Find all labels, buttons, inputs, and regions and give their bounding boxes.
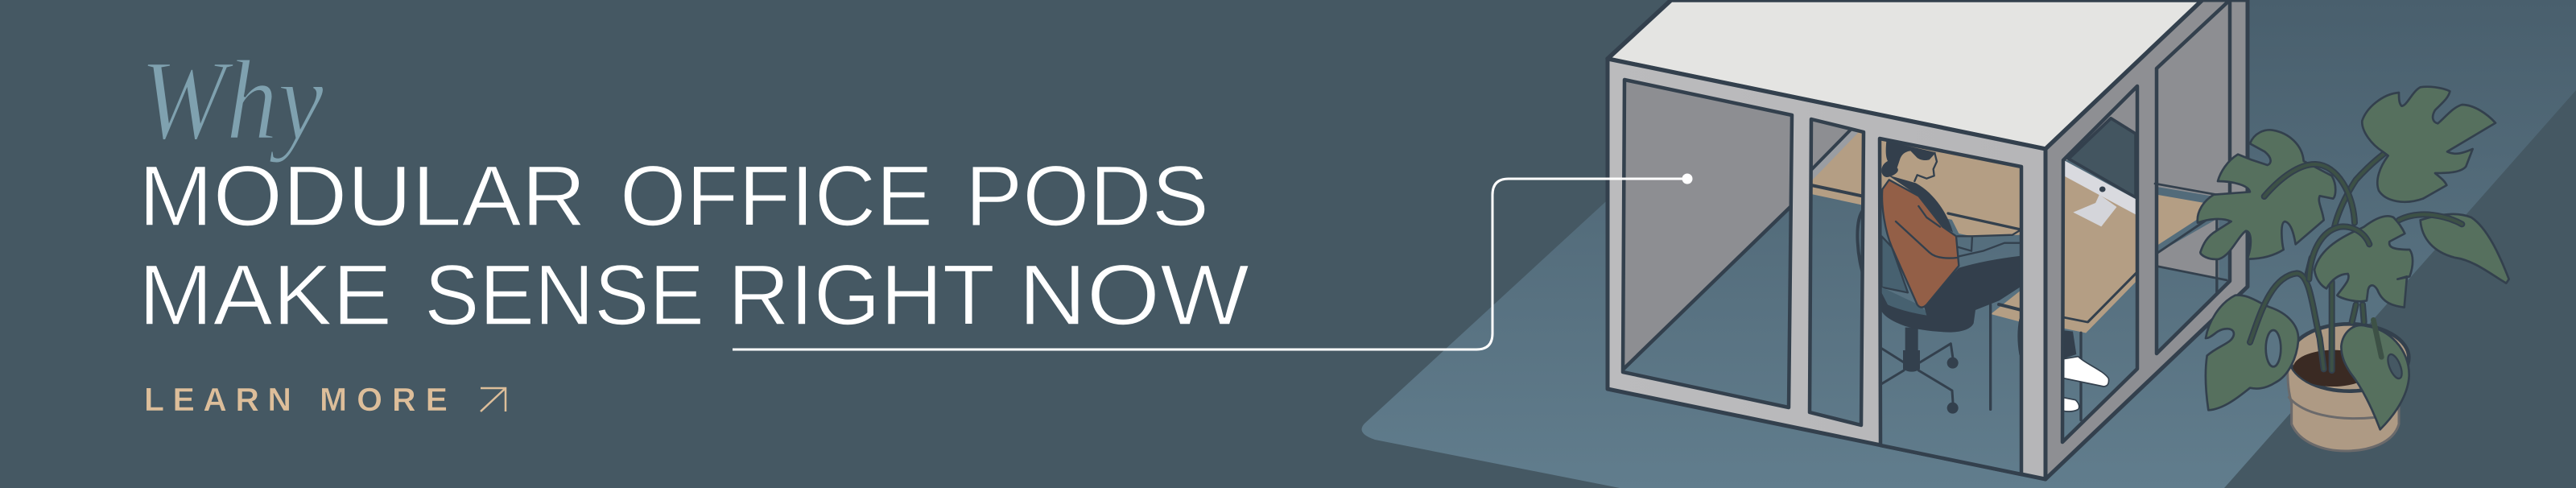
title bbox=[138, 147, 1249, 343]
stems bbox=[2250, 258, 2364, 370]
pot rim bbox=[2289, 324, 2409, 391]
pod right frame bbox=[2046, 0, 2248, 479]
shoe near bbox=[2062, 357, 2109, 387]
front leaf stem bbox=[2373, 320, 2381, 357]
window A wall bbox=[2066, 90, 2136, 160]
window B wall bbox=[2157, 0, 2231, 199]
monitor chin bbox=[2064, 160, 2136, 215]
leaf: centre bbox=[2314, 216, 2413, 308]
leaf: left large bbox=[2198, 130, 2335, 259]
face line bbox=[1914, 153, 1937, 181]
chair casters bbox=[1947, 358, 1959, 414]
title line 2: NOW bbox=[1018, 246, 1249, 343]
learn more link: MORE bbox=[320, 381, 448, 418]
head skin bbox=[1897, 151, 1937, 183]
pod roof bbox=[1608, 0, 2202, 149]
collar bbox=[1888, 175, 1953, 232]
plant bbox=[2198, 87, 2509, 451]
window B desk bbox=[2157, 195, 2219, 246]
jacket lines bbox=[1896, 206, 1958, 258]
back stems bbox=[2334, 127, 2448, 227]
monitor stand bbox=[2073, 195, 2116, 226]
door opening with person bbox=[1880, 139, 2023, 474]
shoe far bbox=[2062, 397, 2079, 411]
lower left leaf bbox=[2206, 296, 2298, 410]
chair seat cushion bbox=[1882, 287, 1926, 316]
title line 1 bbox=[138, 147, 1209, 244]
title line 2: RIGHT bbox=[728, 246, 995, 343]
front left window bbox=[1623, 80, 1792, 407]
pod bbox=[1608, 0, 2248, 479]
front stems bbox=[2264, 164, 2462, 279]
window B outline bbox=[2157, 0, 2230, 354]
desk legs bbox=[1991, 304, 2021, 409]
title line 1: OFFICE bbox=[620, 147, 933, 244]
icon: arrow up-right bbox=[481, 388, 506, 411]
pod front frame bbox=[1608, 59, 2046, 479]
title line 1: MODULAR bbox=[138, 147, 586, 244]
hair bbox=[1881, 141, 1936, 177]
title line 2: MAKE bbox=[138, 246, 392, 343]
window B lower wall bbox=[2157, 218, 2219, 279]
arms bbox=[1958, 231, 2019, 256]
monitor screen bbox=[2069, 118, 2136, 197]
chair back bbox=[1881, 236, 1908, 292]
monitor camera bbox=[2099, 187, 2106, 192]
desk surface bbox=[1880, 139, 2021, 234]
chair stem bbox=[1903, 328, 1920, 372]
leaf: right bbox=[2421, 214, 2509, 283]
window A outline bbox=[2062, 86, 2137, 442]
desk leg bbox=[2079, 332, 2083, 422]
soil bbox=[2293, 349, 2357, 387]
person lower leg bbox=[2064, 330, 2077, 358]
learn more link: LEARN bbox=[144, 381, 291, 418]
pot band bbox=[2289, 397, 2375, 419]
title line 2: SENSE bbox=[424, 246, 704, 343]
right face window A with monitor bbox=[2062, 86, 2138, 442]
learn more link bbox=[144, 381, 506, 418]
callout leader line bbox=[733, 179, 1687, 349]
front leaf hole bbox=[2385, 353, 2405, 380]
right face window B bbox=[2155, 0, 2231, 354]
plant pot and lower leaves bbox=[2206, 258, 2409, 451]
desk top bbox=[2064, 174, 2136, 322]
leaf hole bbox=[2266, 330, 2281, 366]
title line 2 bbox=[138, 246, 1249, 343]
person bbox=[1881, 141, 2023, 414]
title line 1: PODS bbox=[965, 147, 1209, 244]
chair base bbox=[1881, 344, 1953, 403]
leaf: top right bbox=[2362, 87, 2496, 202]
chair seat and legs bbox=[1881, 255, 2023, 333]
narrow window bbox=[1810, 119, 1868, 425]
callout dot bbox=[1682, 174, 1692, 184]
floor light patch bbox=[1362, 0, 2576, 488]
plant upper leaves bbox=[2198, 87, 2509, 308]
pot body bbox=[2288, 365, 2399, 451]
script word: Why: Why bbox=[140, 36, 324, 163]
desk edge bbox=[2064, 274, 2136, 333]
jacket bbox=[1882, 180, 1959, 308]
front leaf bbox=[2341, 325, 2409, 429]
desk corner below leg bbox=[1992, 292, 2020, 322]
